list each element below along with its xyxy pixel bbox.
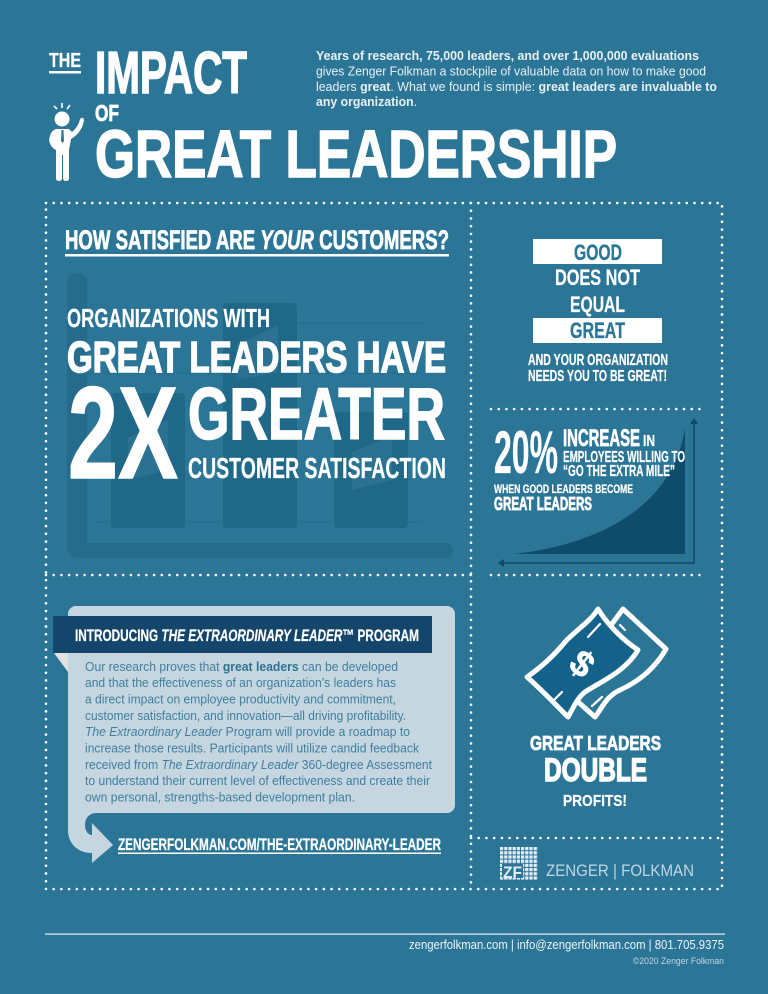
program description: and that the effectiveness of an organization’s leaders has (85, 675, 396, 690)
program description: Our research proves that great leaders can be developed (85, 659, 398, 674)
ribbon heading (53, 616, 432, 653)
title: IMPACT (95, 40, 247, 106)
icon: money bills (527, 609, 666, 717)
stat: great leaders double profits: DOUBLE (544, 752, 647, 788)
background bar chart (67, 273, 453, 558)
stat: 20 percent increase: IN (643, 433, 655, 450)
stat: great leaders double profits: GREAT LEADERS (530, 733, 661, 755)
panel: introducing the extraordinary leader (53, 606, 455, 863)
program description: received from The Extraordinary Leader 360-degree Assessment (85, 757, 432, 772)
stat: 20 percent increase: WHEN GOOD LEADERS BECOME (494, 482, 633, 496)
intro text: Years of research, 75,000 leaders, and over 1,000,000 evaluations (316, 48, 699, 63)
footer: zengerfolkman.com | info@zengerfolkman.com | 801.705.9375 (409, 938, 724, 952)
dotted frame and dividers (46, 203, 722, 889)
stat: 20 percent increase (494, 419, 685, 514)
intro text (316, 48, 717, 109)
icon: money bills: $ (562, 641, 603, 686)
headline: 2X greater customer satisfaction (67, 303, 446, 506)
stat: great leaders double profits: PROFITS! (563, 793, 627, 810)
ribbon fold (54, 653, 68, 672)
stat: 20 percent increase: INCREASE (563, 425, 640, 452)
footer: ©2020 Zenger Folkman (633, 956, 724, 967)
intro text: gives Zenger Folkman a stockpile of valuable data on how to make good (316, 64, 706, 78)
title: THE (49, 50, 81, 72)
logo: Zenger Folkman: ZENGER | FOLKMAN (546, 861, 694, 880)
panel: good does not equal great: EQUAL (570, 292, 625, 317)
program description: customer satisfaction, and innovation—all driving profitability. (85, 708, 406, 723)
callout background with arrow (68, 606, 455, 863)
panel: good does not equal great: GREAT (570, 318, 625, 343)
stat: great leaders double profits (530, 733, 661, 810)
intro text: leaders great. What we found is simple: great leaders are invaluable to (316, 79, 717, 94)
heading: customers: HOW SATISFIED ARE YOUR CUSTOMERS? (65, 225, 449, 255)
chart: rising curve with axes (498, 418, 698, 567)
program description: to understand their current level of effectiveness and create their (85, 773, 431, 788)
icon: leader figure (49, 103, 84, 181)
headline: 2X greater customer satisfaction: GREAT LEADERS HAVE (67, 333, 446, 382)
panel: good does not equal great (528, 239, 668, 385)
footer (45, 934, 725, 967)
logo: Zenger Folkman (500, 847, 694, 882)
program description: a direct impact on employee productivity and commitment, (85, 692, 396, 706)
stat: 20 percent increase: “GO THE EXTRA MILE” (563, 463, 675, 480)
program description: increase those results. Participants will utilize candid feedback (85, 740, 419, 756)
program description: own personal, strengths-based development plan. (85, 790, 355, 804)
title: OF (95, 100, 119, 126)
panel: good does not equal great: NEEDS YOU TO BE GREAT! (528, 368, 667, 385)
title (49, 40, 617, 192)
headline: 2X greater customer satisfaction: GREATER (188, 374, 445, 455)
program description: The Extraordinary Leader Program will provide a roadmap to (85, 724, 410, 739)
panel: good does not equal great: GOOD (574, 240, 622, 265)
panel: good does not equal great: AND YOUR ORGANIZATION (528, 352, 668, 369)
program description (85, 659, 432, 804)
title: GREAT LEADERSHIP (95, 117, 617, 192)
panel: good does not equal great: DOES NOT (555, 265, 640, 290)
stat: 20 percent increase: GREAT LEADERS (494, 494, 592, 514)
ribbon heading: INTRODUCING THE EXTRAORDINARY LEADER™ PROGRAM (75, 627, 419, 645)
intro text: any organization. (316, 94, 417, 109)
headline: 2X greater customer satisfaction: 2X (68, 359, 178, 506)
stat: 20 percent increase: EMPLOYEES WILLING TO (563, 449, 685, 466)
headline: 2X greater customer satisfaction: ORGANIZATIONS WITH (67, 303, 270, 333)
stat: 20 percent increase: 20% (494, 419, 558, 486)
logo: Zenger Folkman: ZF (503, 863, 522, 882)
headline: 2X greater customer satisfaction: CUSTOMER SATISFACTION (188, 453, 446, 485)
link: program url: ZENGERFOLKMAN.COM/THE-EXTRAORDINARY-LEADER (118, 835, 441, 854)
